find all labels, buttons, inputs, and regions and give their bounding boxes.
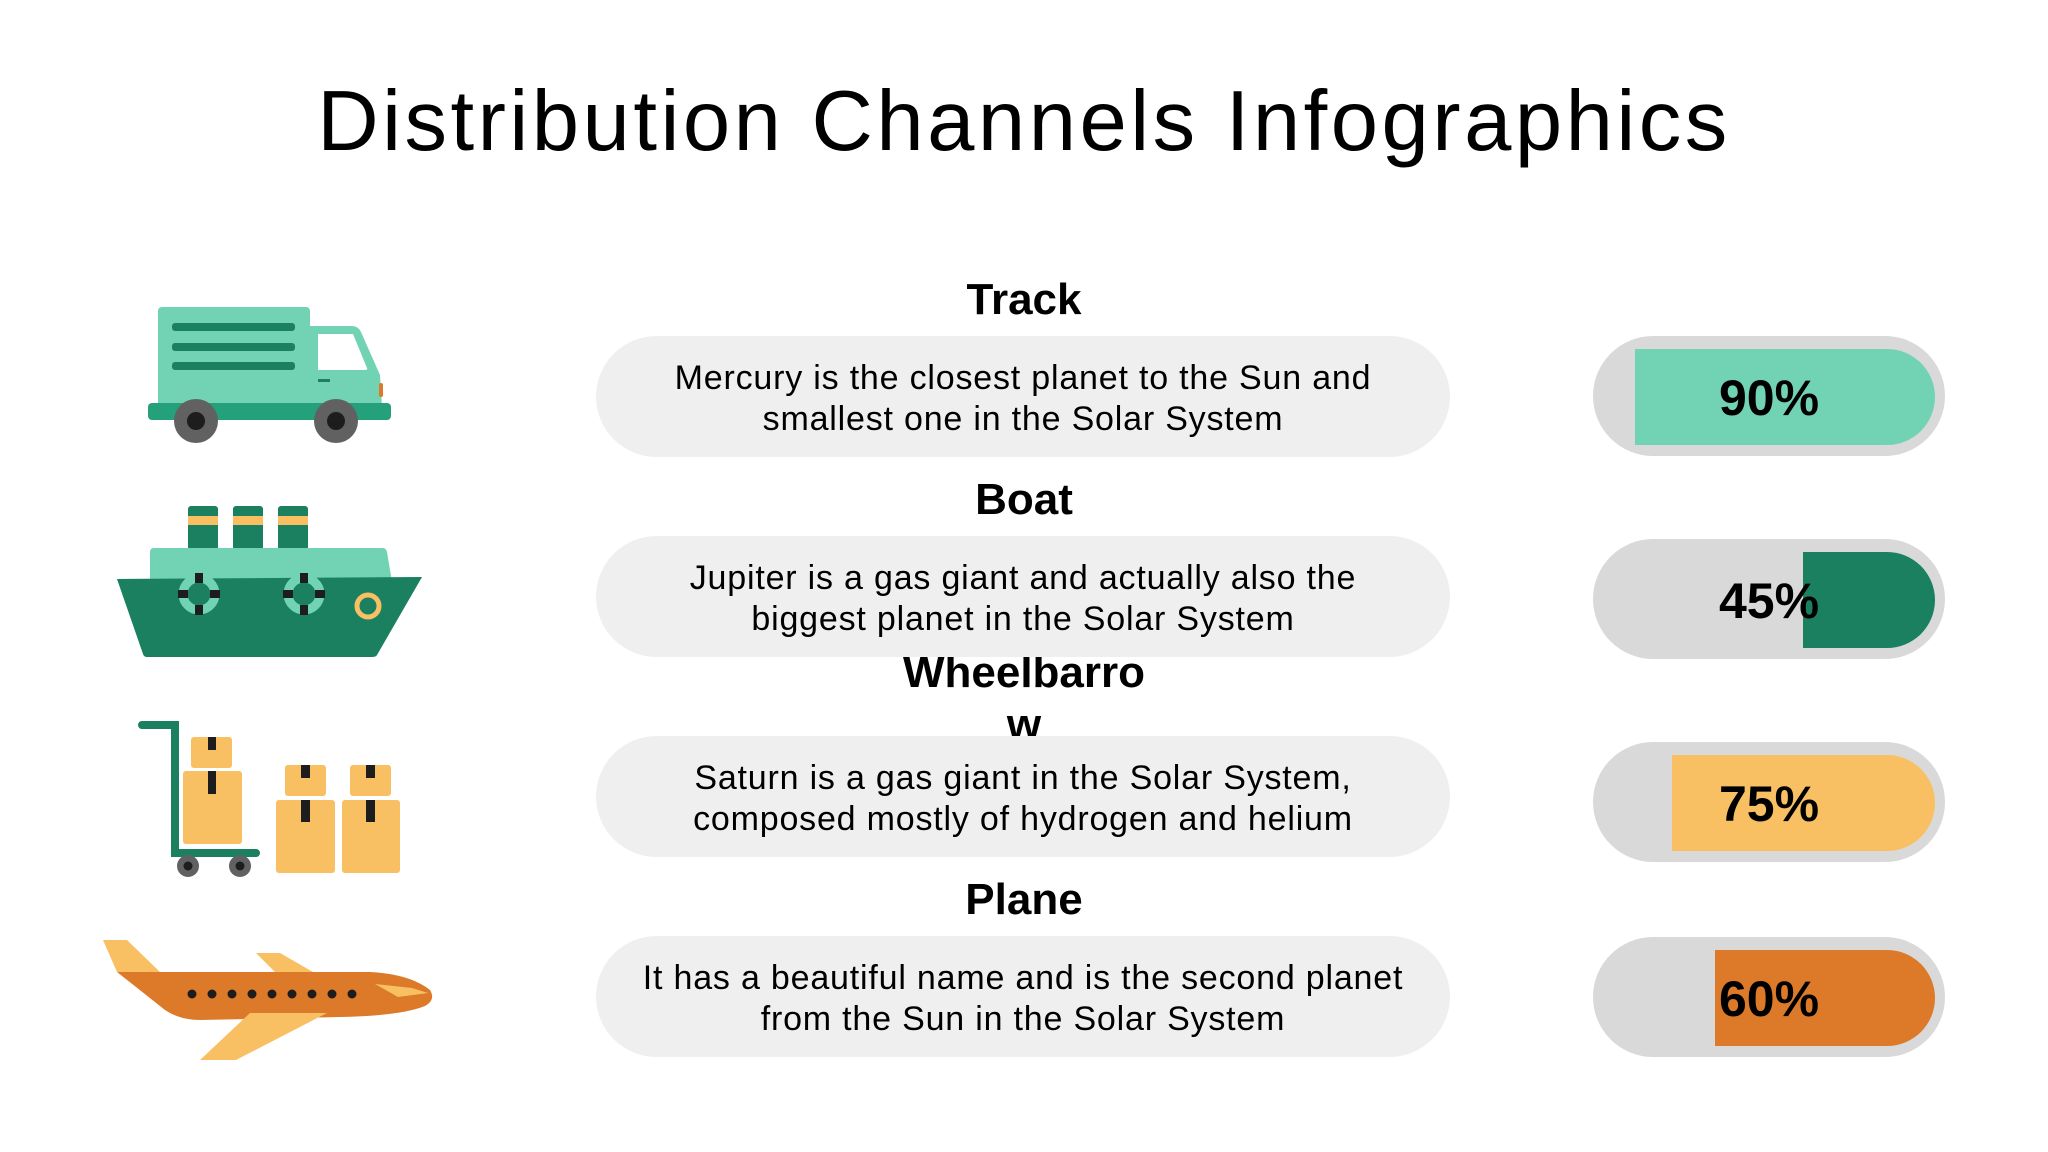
title: Distribution Channels Infographics bbox=[317, 74, 1731, 169]
progress bar: 90% bbox=[1593, 336, 1945, 456]
text: Boat description: Jupiter is a gas giant and actually also the bbox=[690, 558, 1356, 596]
heading: Track: Track bbox=[966, 275, 1081, 324]
icon: boat bbox=[117, 506, 422, 657]
progress bar: 45% bbox=[1593, 539, 1945, 659]
progress bar: 45%: 45% bbox=[1719, 573, 1819, 629]
heading: Wheelbarrow: w bbox=[1007, 700, 1041, 749]
progress bar: 60%: 60% bbox=[1719, 971, 1819, 1027]
progress bar: 60% bbox=[1593, 937, 1945, 1057]
text: Track description: Mercury is the closest planet to the Sun and bbox=[675, 358, 1371, 396]
text: Plane description: It has a beautiful name and is the second planet bbox=[643, 958, 1403, 996]
text: Boat description bbox=[596, 536, 1450, 657]
text: Plane description: from the Sun in the Solar System bbox=[761, 1000, 1285, 1038]
icon: wheelbarrow with boxes bbox=[138, 721, 400, 877]
icon: truck bbox=[148, 307, 391, 443]
heading: Wheelbarrow bbox=[903, 648, 1145, 749]
progress bar: 75%: 75% bbox=[1719, 776, 1819, 832]
text: Track description: smallest one in the Solar System bbox=[763, 400, 1283, 438]
icon: plane bbox=[103, 940, 432, 1060]
text: Track description bbox=[596, 336, 1450, 457]
text: Wheelbarrow description: composed mostly of hydrogen and helium bbox=[693, 800, 1353, 838]
text: Boat description: biggest planet in the Solar System bbox=[751, 600, 1295, 638]
text: Wheelbarrow description: Saturn is a gas giant in the Solar System, bbox=[694, 758, 1352, 796]
progress bar: 90%: 90% bbox=[1719, 370, 1819, 426]
text: Wheelbarrow description bbox=[596, 736, 1450, 857]
progress bar: 75% bbox=[1593, 742, 1945, 862]
heading: Boat: Boat bbox=[975, 475, 1073, 524]
heading: Plane: Plane bbox=[965, 875, 1083, 924]
heading: Wheelbarrow: Wheelbarro bbox=[903, 648, 1145, 697]
text: Plane description bbox=[596, 936, 1450, 1057]
